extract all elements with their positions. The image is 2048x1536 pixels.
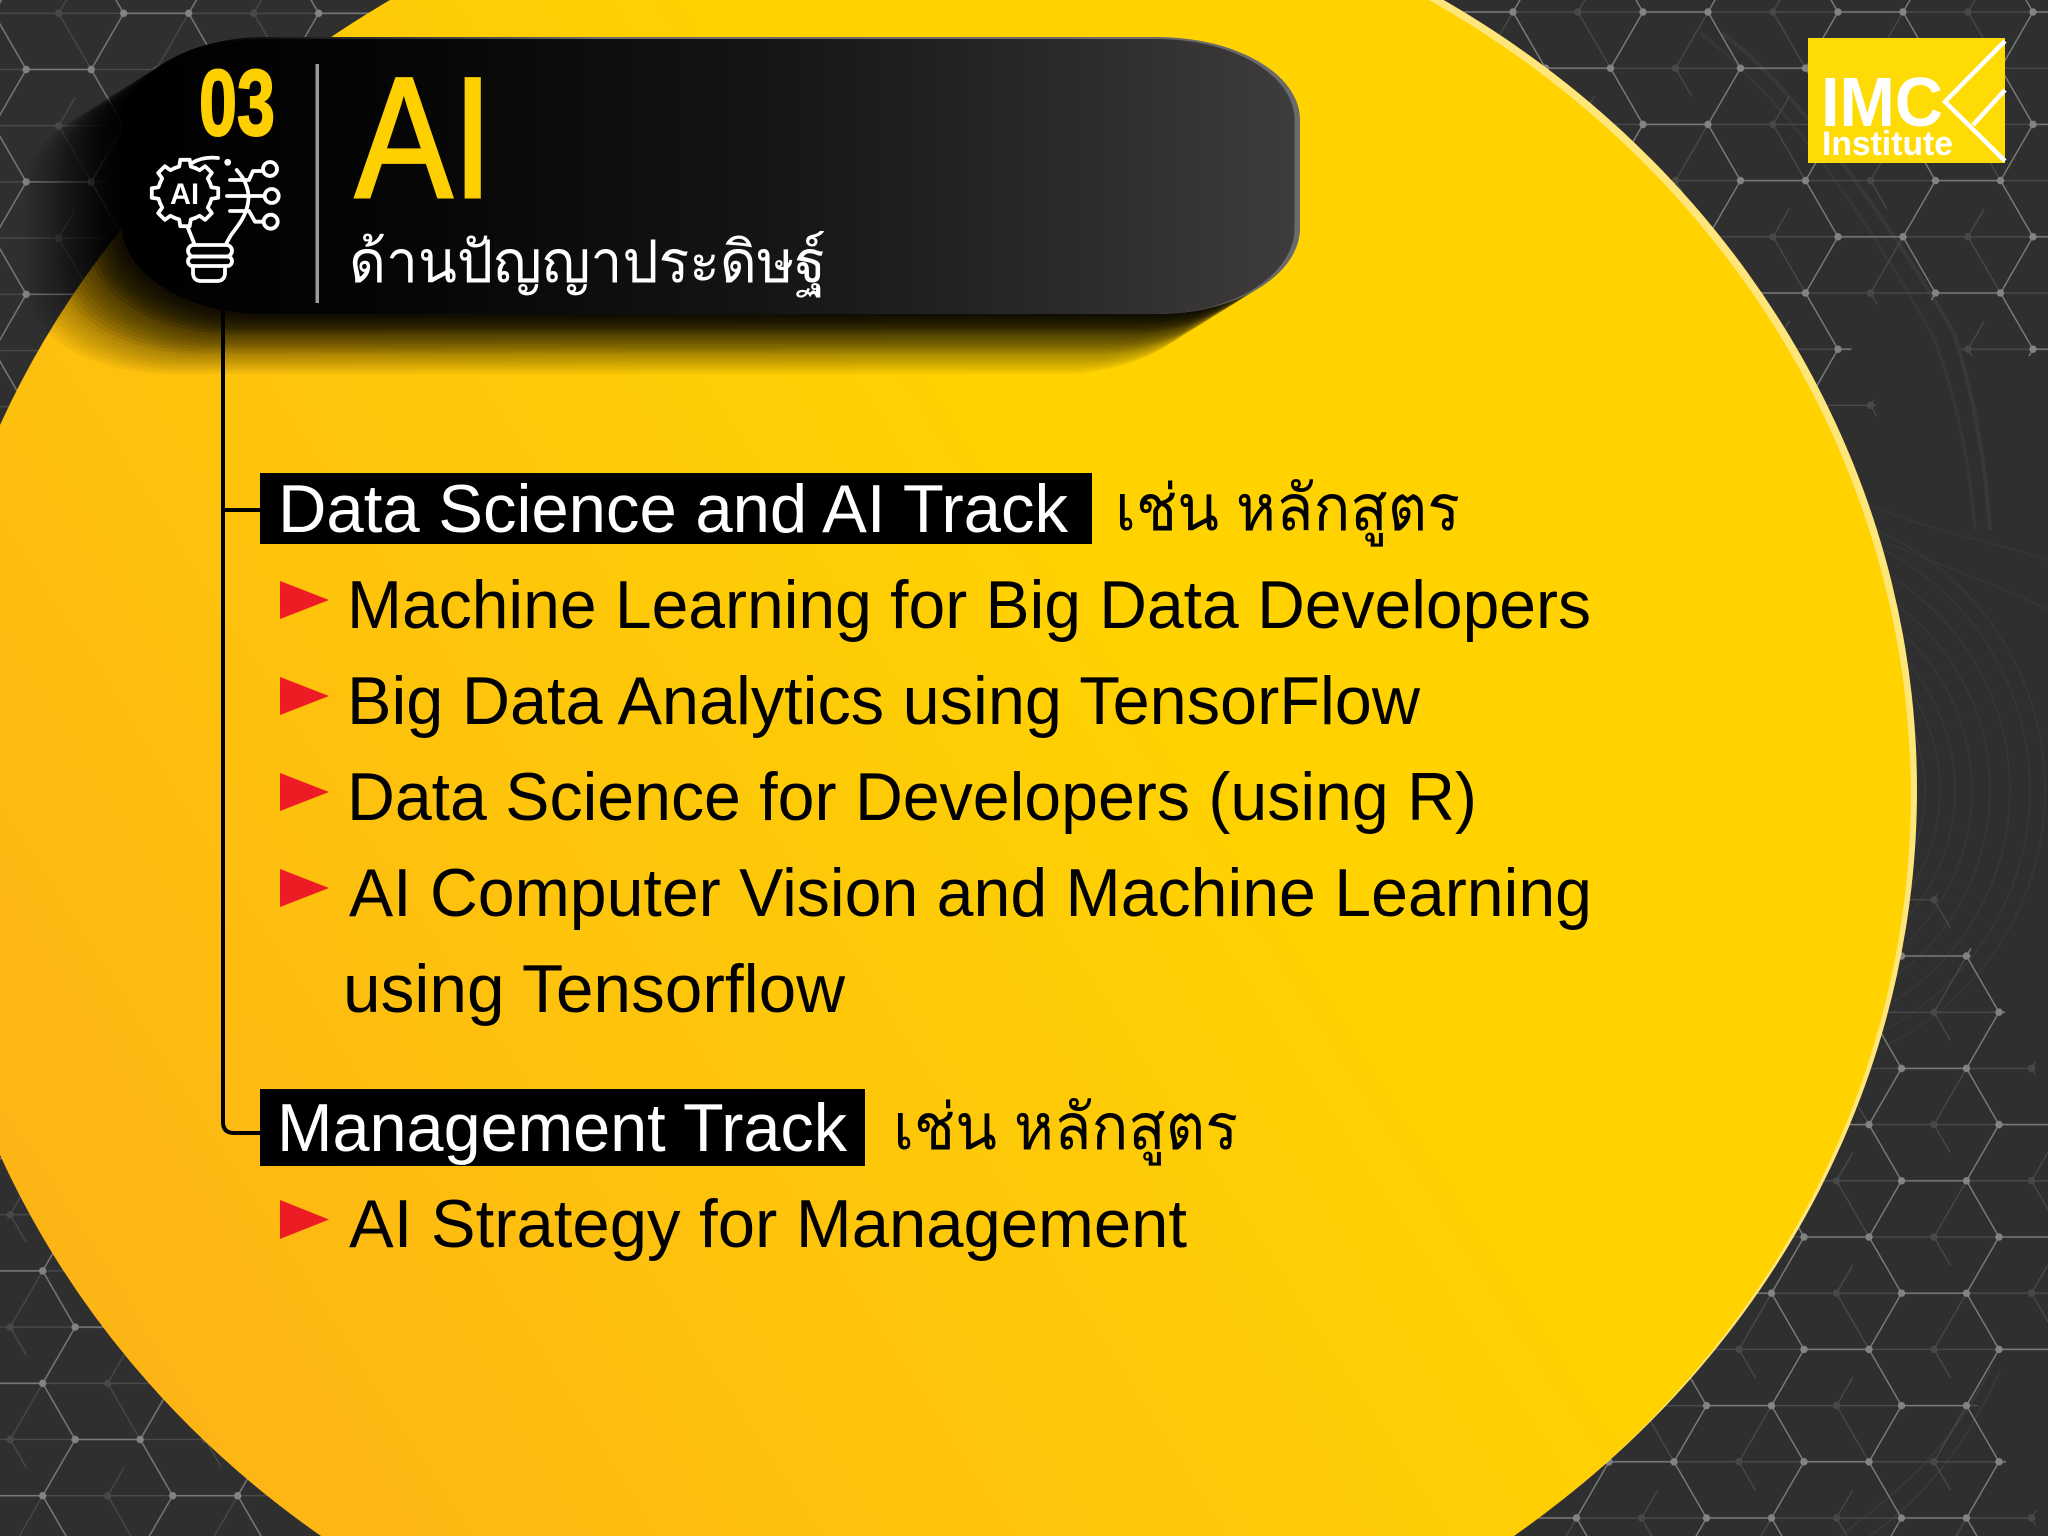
logo: IMC Institute xyxy=(1808,38,2005,163)
subheading: Thai: ด้านปัญญาประดิษฐ์ xyxy=(349,230,826,297)
divider xyxy=(316,64,319,303)
course item 3: Data Science for Developers (using R) xyxy=(347,759,1477,835)
background curve mesh xyxy=(1475,33,2048,1536)
course item 4 xyxy=(280,855,1592,1027)
Thai suffix: เช่น หลักสูตร xyxy=(893,1091,1238,1166)
course item 4: using Tensorflow xyxy=(343,951,846,1027)
panel: header bar xyxy=(122,37,1300,314)
course item: AI Strategy for Management xyxy=(349,1186,1187,1262)
track label box: Management Track xyxy=(277,1090,848,1166)
logo: IMC Institute: Institute xyxy=(1822,125,1953,163)
course item 2: Big Data Analytics using TensorFlow xyxy=(347,663,1421,739)
panel: Management Track xyxy=(260,1089,1238,1262)
background hexagon network: bottom right xyxy=(1000,893,2048,1536)
section number: 03 xyxy=(199,50,275,155)
course item 4: AI Computer Vision and Machine Learning xyxy=(349,855,1592,931)
logo: IMC Institute: IMC xyxy=(1821,63,1943,141)
background hexagon network: top right xyxy=(1000,0,2048,445)
heading: AI: AI xyxy=(355,42,493,234)
course item 1: Machine Learning for Big Data Developers xyxy=(347,567,1591,643)
Thai suffix: เช่น หลักสูตร xyxy=(1115,472,1460,547)
panel: Data Science and AI Track xyxy=(260,471,1592,1027)
connector line from header to tracks xyxy=(223,310,262,1133)
icon: AI light bulb xyxy=(152,158,279,281)
long shadow of header bar xyxy=(26,40,1296,374)
header bar body xyxy=(122,37,1300,314)
track label box: Data Science and AI Track xyxy=(278,471,1069,547)
background hexagon network: top left xyxy=(0,0,1000,450)
icon: AI light bulb: AI xyxy=(170,178,199,211)
background hexagon network: bottom left xyxy=(0,1150,1000,1536)
